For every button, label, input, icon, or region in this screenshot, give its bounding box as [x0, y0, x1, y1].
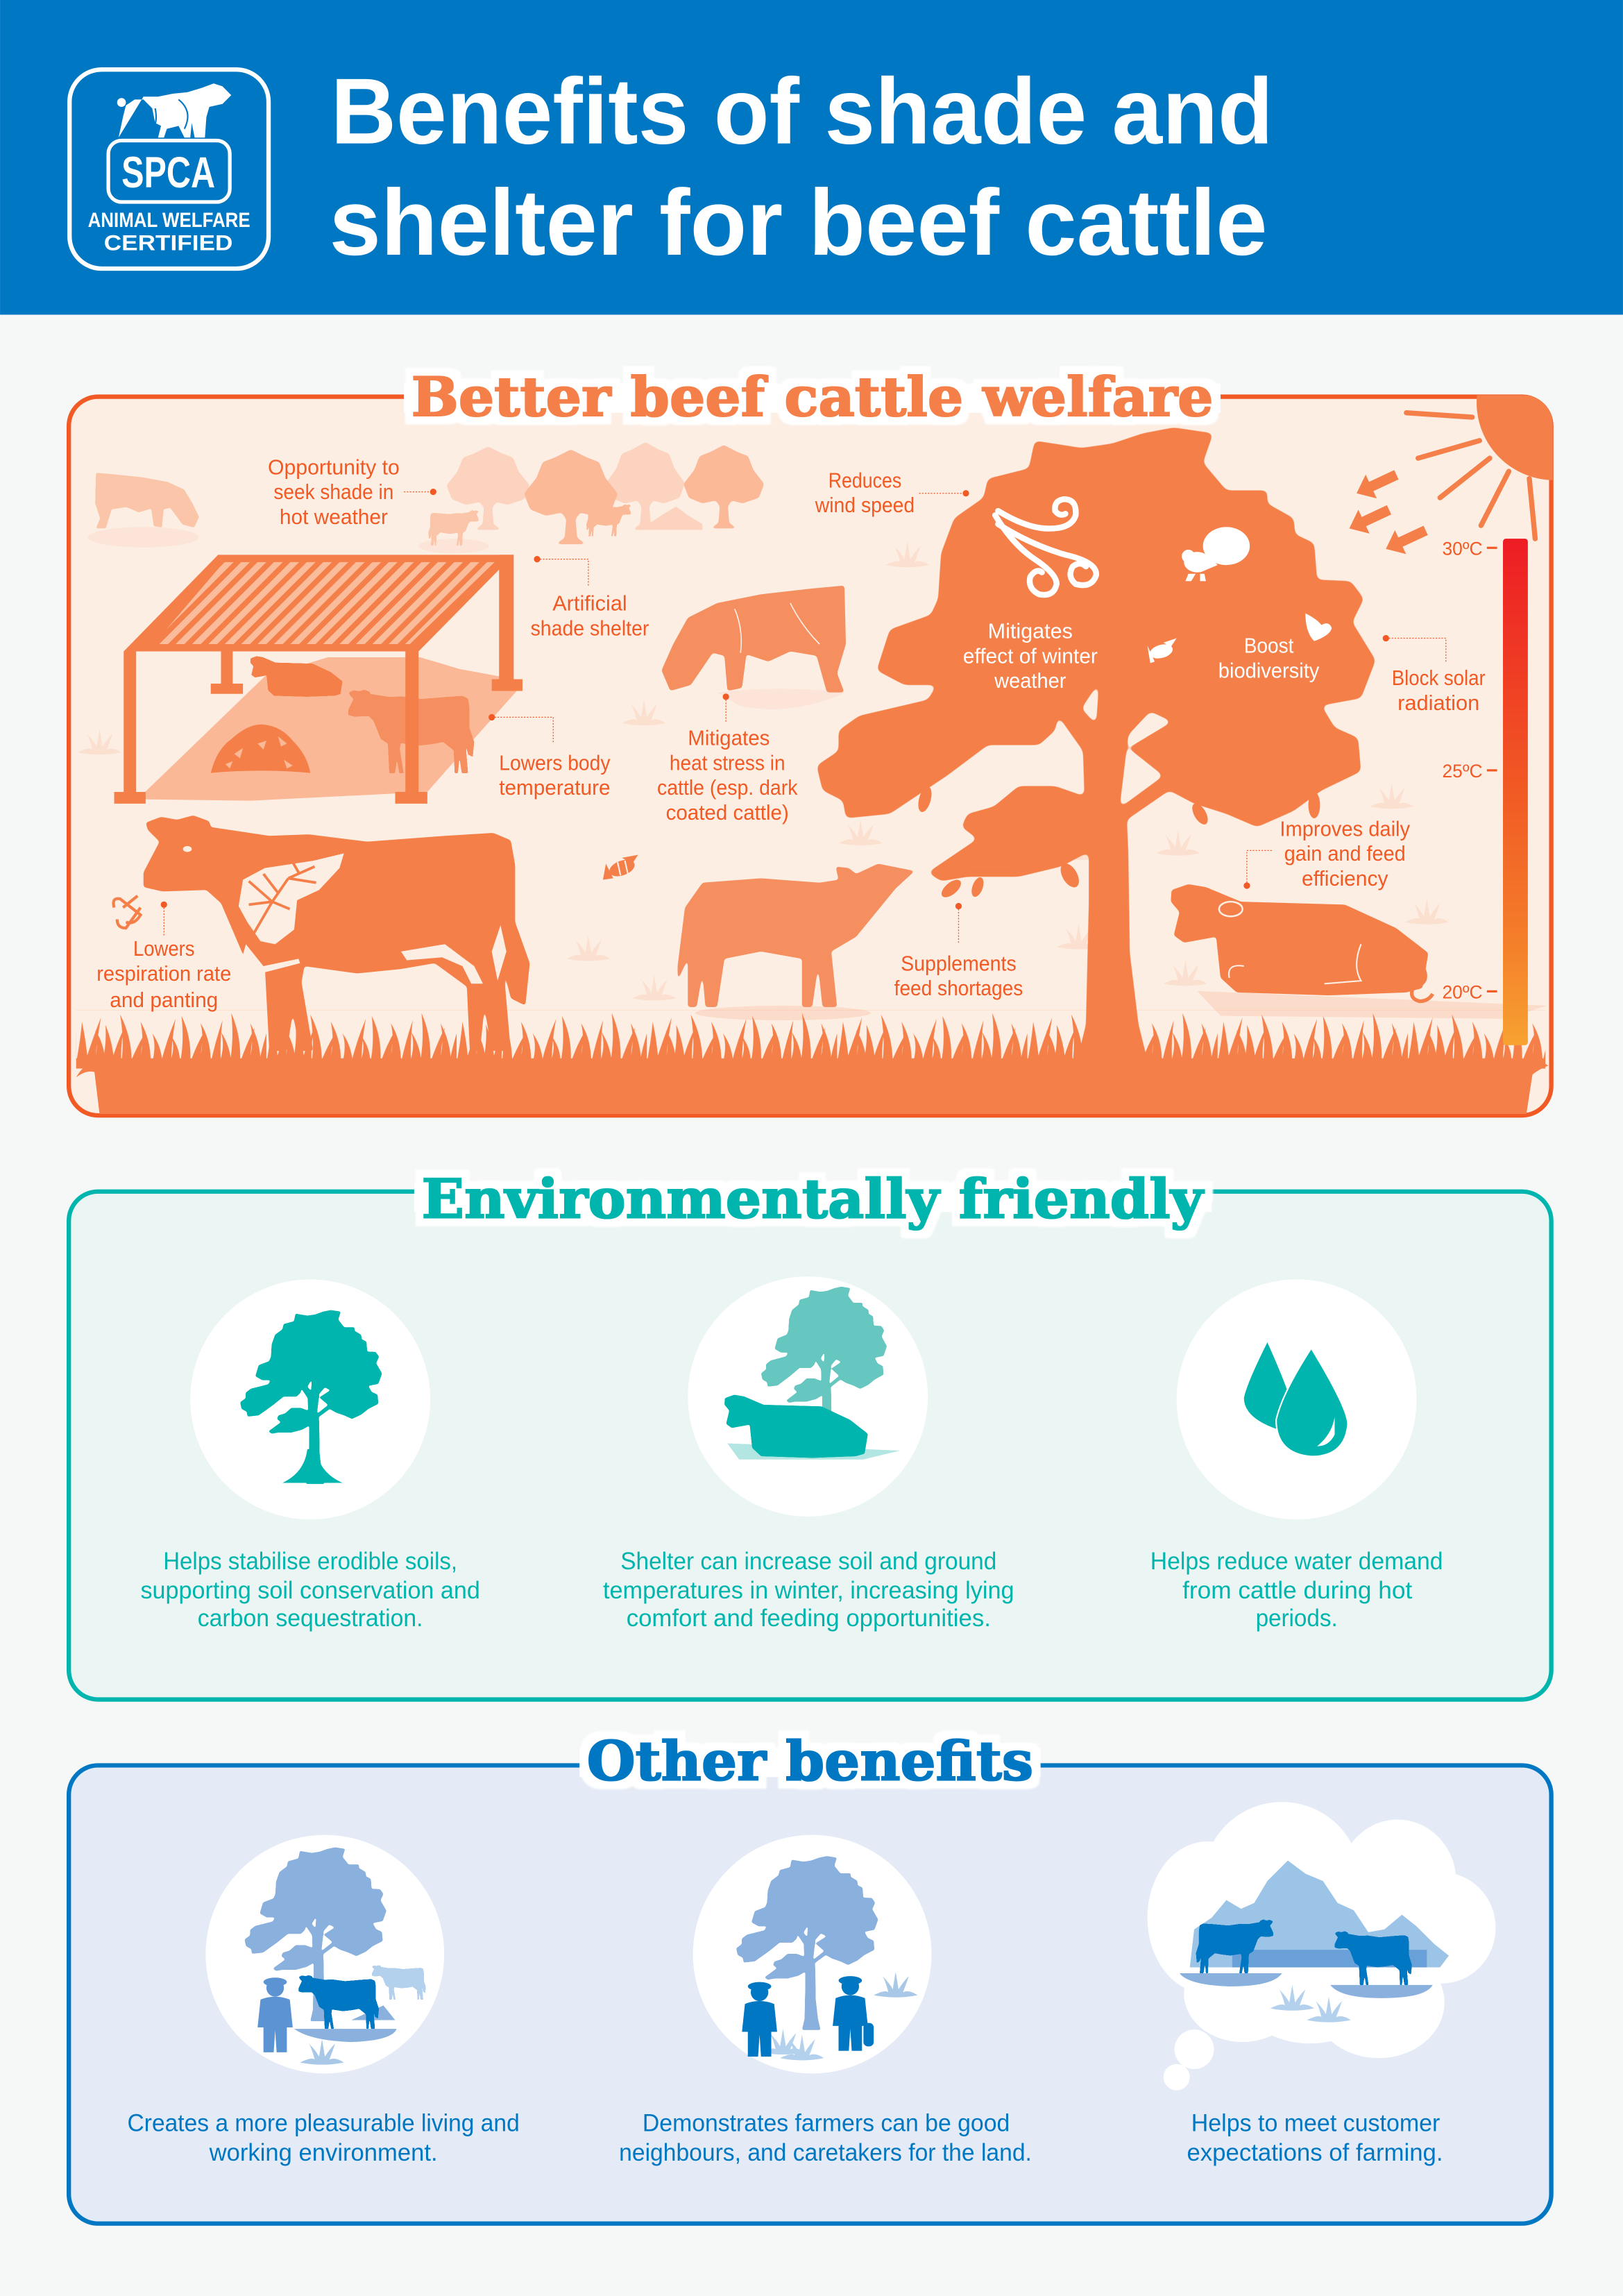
icon: bee	[1148, 639, 1177, 663]
front posts	[114, 652, 427, 804]
label: lowers respiration rate: respiration rate	[96, 962, 231, 986]
label: artificial shade shelter: Artificial	[552, 591, 627, 615]
background grass tufts	[78, 541, 1449, 1001]
thermometer scale: 20ºC	[1443, 981, 1482, 1002]
panel: better beef cattle welfare	[69, 325, 1623, 1115]
lungs	[239, 854, 344, 944]
label: reduces wind speed	[815, 469, 969, 517]
label: lowers respiration rate	[96, 902, 231, 1012]
label: opportunity to seek shade	[268, 455, 436, 529]
logo: SPCA animal welfare certified: SPCA	[121, 149, 215, 197]
icon: tree and lying cow in circle	[688, 1276, 928, 1517]
logo: SPCA animal welfare certified: ANIMAL WELFARE	[88, 209, 250, 232]
icon: two farmers under tree	[693, 1835, 931, 2073]
lying cow under shelter	[250, 656, 343, 697]
label: block solar radiation	[1383, 635, 1486, 715]
label: opportunity to seek shade: hot weather	[280, 505, 388, 529]
icon: wind swirls	[995, 499, 1096, 595]
icon: water drops in circle	[1177, 1279, 1417, 1519]
heading: better beef cattle welfare: Better beef cattle welfare	[411, 366, 1213, 429]
icon: breath swirl	[113, 896, 141, 928]
text: pleasurable environment: Creates a more pleasurable living and	[128, 2111, 520, 2137]
label: reduces wind speed: wind speed	[815, 493, 915, 517]
row of shade trees with calves	[418, 442, 764, 553]
label: lowers body temperature	[488, 714, 611, 800]
text: water demand	[1150, 1548, 1443, 1632]
label: mitigates heat stress	[657, 693, 798, 825]
hay mound	[211, 725, 310, 773]
label: mitigates effect of winter weather: Mitigates	[988, 620, 1073, 643]
label: improves daily gain: efficiency	[1302, 867, 1388, 890]
label: opportunity to seek shade: seek shade in	[273, 480, 393, 504]
panel: environmentally friendly	[69, 1168, 1552, 1700]
text: water demand: periods.	[1256, 1605, 1338, 1632]
label: lowers respiration rate: and panting	[110, 988, 218, 1012]
logo: SPCA animal welfare certified	[69, 69, 269, 269]
icon: small bee	[603, 855, 638, 880]
label: improves daily gain	[1243, 817, 1411, 890]
label: artificial shade shelter	[531, 556, 649, 640]
text: water demand: from cattle during hot	[1182, 1578, 1413, 1604]
grazing cow	[661, 586, 846, 709]
shelter ground shade	[137, 657, 518, 801]
text: good neighbours	[619, 2111, 1032, 2166]
cow body highlights	[243, 925, 507, 984]
arrows: solar radiation	[1344, 463, 1431, 561]
text: water demand: Helps reduce water demand	[1150, 1548, 1443, 1575]
lying cow	[1171, 884, 1433, 1002]
text: soils: Helps stabilise erodible soils,	[163, 1548, 457, 1575]
thermometer scale: 25ºC	[1443, 761, 1482, 782]
label: supplements feed shortages	[894, 903, 1023, 1000]
text: pleasurable environment	[128, 2111, 520, 2166]
cloud: tree line	[1190, 1861, 1449, 1968]
icon: heart	[1305, 614, 1332, 641]
distant grazing cow	[88, 473, 199, 548]
big cow with lungs	[144, 816, 530, 1051]
label: mitigates effect of winter weather: effect of winter	[963, 644, 1098, 668]
label: lowers respiration rate: Lowers	[133, 937, 195, 961]
text: ground temperatures: Shelter can increase soil and ground	[620, 1548, 996, 1575]
icon: farmer and cattle under tree	[205, 1835, 444, 2073]
label: improves daily gain: Improves daily	[1280, 817, 1411, 841]
icon: tree in circle	[190, 1279, 430, 1519]
label: opportunity to seek shade: Opportunity to	[268, 455, 400, 479]
text: soils: supporting soil conservation and	[141, 1578, 480, 1604]
label: boost biodiversity	[1218, 634, 1320, 682]
cloud: cattle on ground	[1180, 1920, 1433, 1998]
label: boost biodiversity: biodiversity	[1218, 659, 1320, 682]
text: soils: carbon sequestration.	[198, 1605, 423, 1632]
header banner	[0, 0, 1623, 314]
standing cow under shelter	[348, 690, 474, 773]
thermometer scale	[1443, 538, 1528, 1045]
text: customer expectations	[1187, 2111, 1443, 2166]
text: ground temperatures: comfort and feeding opportunities.	[627, 1605, 991, 1632]
thermometer scale: 30ºC	[1443, 538, 1482, 559]
text: customer expectations: Helps to meet customer	[1191, 2111, 1440, 2137]
label: mitigates heat stress: Mitigates	[688, 726, 770, 750]
big shade tree	[817, 428, 1376, 1065]
artificial shade shelter	[114, 555, 522, 804]
label: lowers body temperature: Lowers body	[499, 751, 611, 775]
text: soils	[141, 1548, 480, 1632]
logo: SPCA animal welfare certified: CERTIFIED	[104, 230, 232, 255]
title	[330, 59, 1273, 275]
text: good neighbours: neighbours, and caretakers for the land.	[619, 2140, 1032, 2166]
label: mitigates effect of winter weather: weather	[994, 669, 1066, 693]
label: reduces wind speed: Reduces	[829, 469, 901, 492]
label: mitigates effect of winter weather	[963, 620, 1098, 693]
title: shelter for beef cattle	[330, 170, 1267, 275]
icon: native bird	[1182, 527, 1250, 581]
label: block solar radiation: radiation	[1397, 691, 1479, 715]
label: improves daily gain: gain and feed	[1284, 842, 1406, 866]
back posts	[211, 555, 522, 694]
text: good neighbours: Demonstrates farmers can be good	[643, 2111, 1010, 2137]
thought cloud	[1148, 1802, 1495, 2091]
text: ground temperatures	[603, 1548, 1014, 1632]
text: customer expectations: expectations of farming.	[1187, 2140, 1443, 2166]
ground shadows	[695, 991, 1547, 1020]
tree leaves	[916, 785, 1320, 900]
heading: other benefits: Other benefits	[587, 1730, 1033, 1793]
slatted roof	[124, 555, 513, 652]
sun with rays	[1404, 395, 1553, 541]
panel: other benefits	[69, 1730, 1552, 2224]
browsing cow	[678, 863, 915, 1007]
label: mitigates heat stress: cattle (esp. dark	[657, 776, 798, 800]
heading: environmentally friendly: Environmentally friendly	[421, 1168, 1205, 1231]
label: mitigates heat stress: heat stress in	[670, 751, 785, 775]
label: lowers body temperature: temperature	[499, 776, 611, 800]
cloud: grass tufts	[1271, 1985, 1351, 2023]
label: artificial shade shelter: shade shelter	[531, 616, 649, 640]
grass strip	[76, 1010, 1548, 1114]
label: boost biodiversity: Boost	[1244, 634, 1294, 658]
label: supplements feed shortages: Supplements	[901, 952, 1017, 975]
text: pleasurable environment: working environment.	[209, 2140, 438, 2166]
label: block solar radiation: Block solar	[1392, 666, 1486, 690]
title: Benefits of shade and	[331, 59, 1273, 164]
label: supplements feed shortages: feed shortages	[894, 977, 1023, 1000]
label: mitigates heat stress: coated cattle)	[666, 801, 789, 825]
text: ground temperatures: temperatures in winter, increasing lying	[603, 1578, 1014, 1604]
